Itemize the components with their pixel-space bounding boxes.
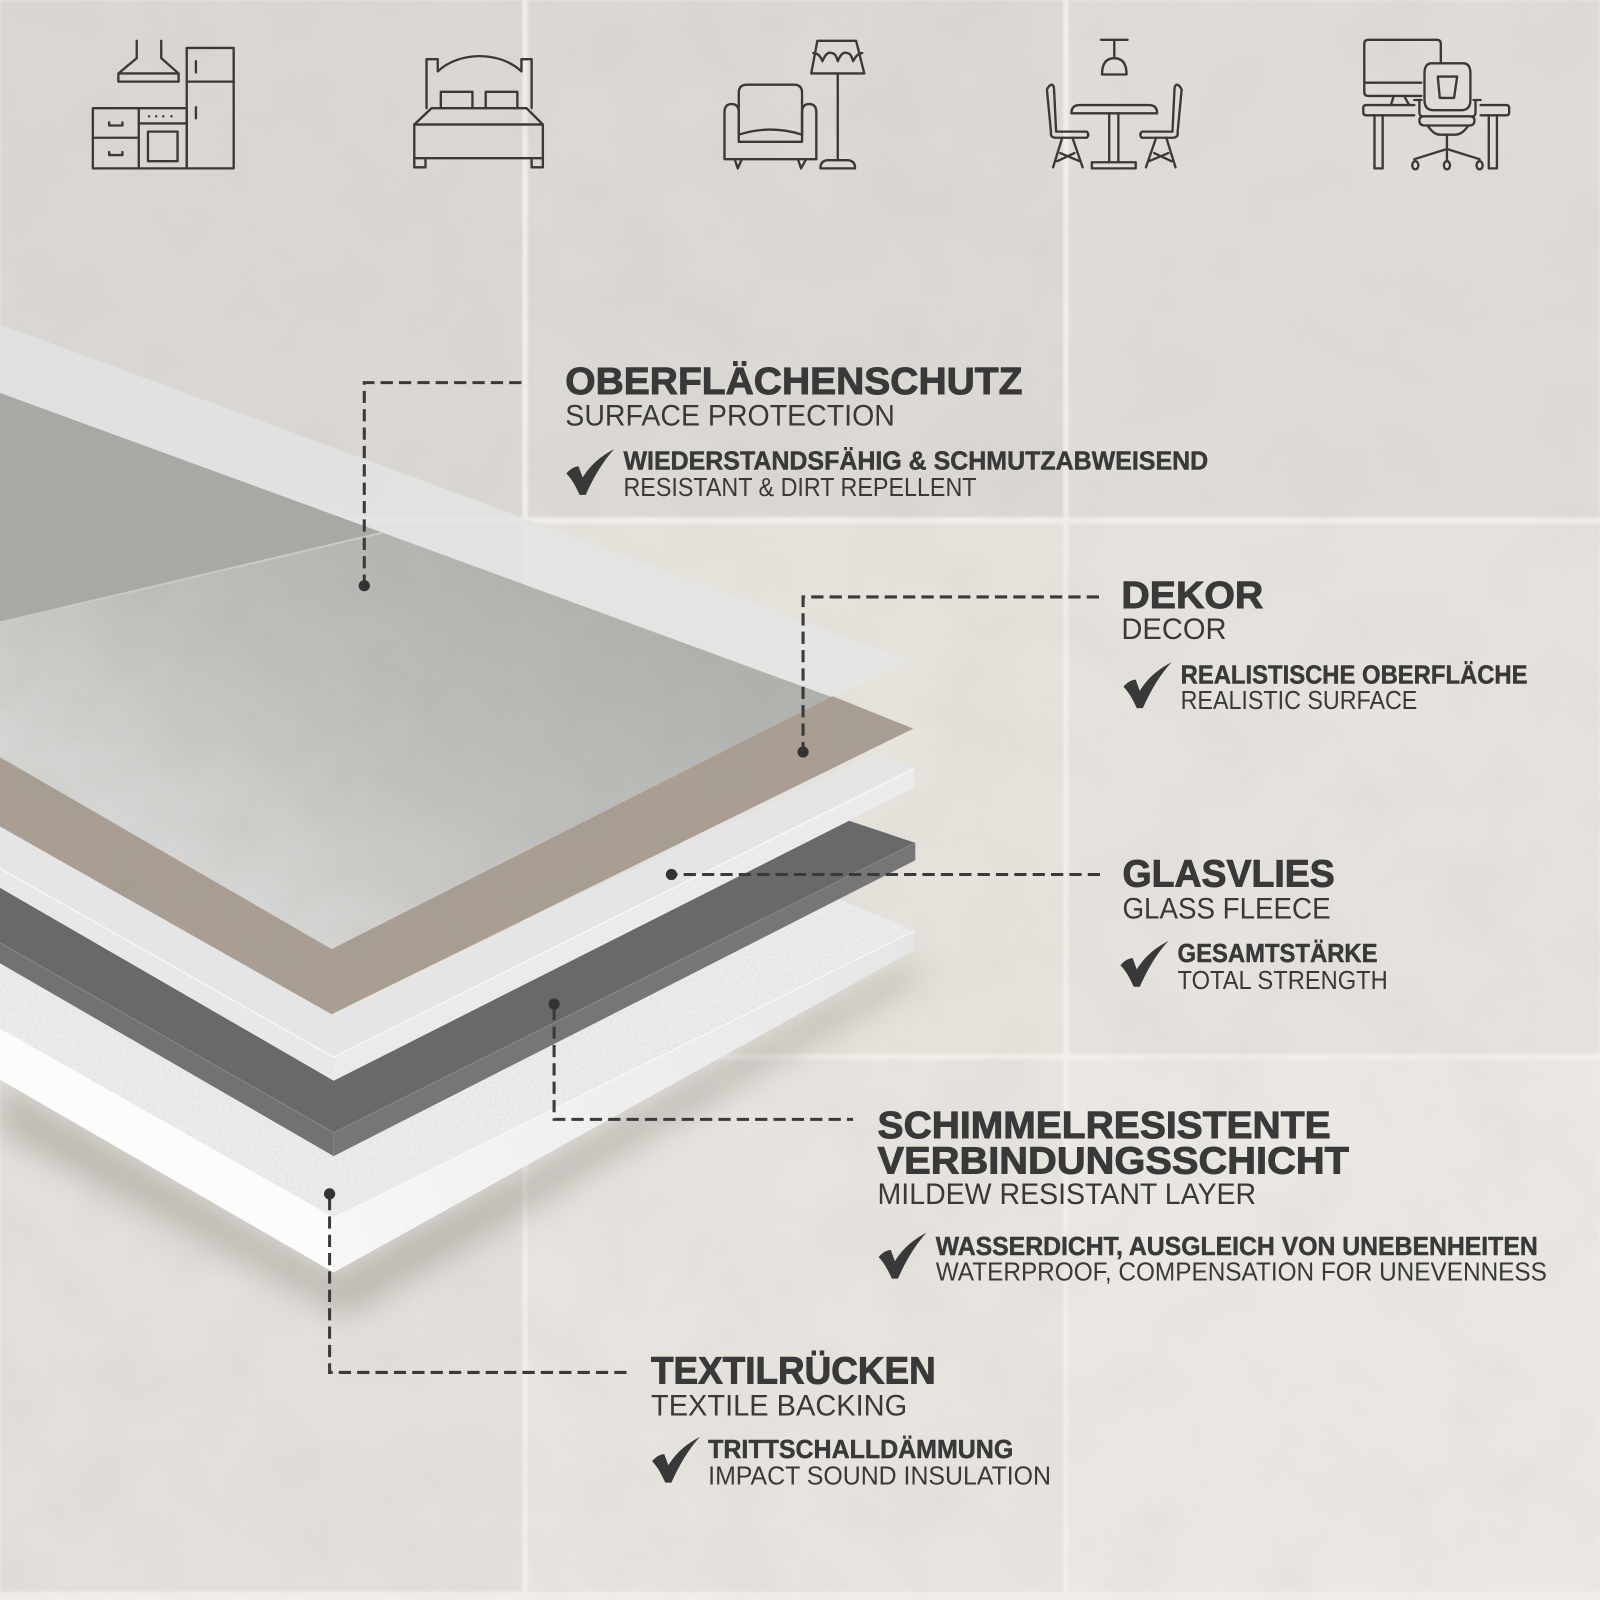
feature text English: WATERPROOF, COMPENSATION FOR UNEVENNESS: [936, 1259, 1547, 1287]
feature text German: WIEDERSTANDSFÄHIG & SCHMUTZABWEISEND: [623, 447, 1208, 475]
panel: Dekor: [1121, 574, 1528, 715]
icon: check mark: [652, 1437, 700, 1483]
feature text German: TRITTSCHALLDÄMMUNG: [708, 1436, 1013, 1464]
layer: transparent surface protection film: [0, 324, 911, 697]
icon: office desk: [1363, 40, 1509, 169]
heading: TEXTILRÜCKEN: [651, 1350, 936, 1392]
icon: check mark: [879, 1233, 927, 1279]
icon: armchair: [724, 85, 816, 168]
icon: check mark: [566, 449, 614, 495]
subheading: MILDEW RESISTANT LAYER: [878, 1178, 1256, 1211]
feature text English: TOTAL STRENGTH: [1178, 967, 1388, 995]
feature text English: IMPACT SOUND INSULATION: [708, 1463, 1051, 1491]
panel: Glasvlies: [1120, 853, 1388, 995]
layer: textile backing: [0, 931, 914, 1272]
feature text English: RESISTANT & DIRT REPELLENT: [623, 474, 977, 502]
leader: textile backing: [324, 1188, 631, 1372]
heading: GLASVLIES: [1122, 853, 1335, 895]
icon: check mark: [1123, 662, 1171, 708]
subheading: SURFACE PROTECTION: [565, 400, 895, 433]
subheading: TEXTILE BACKING: [651, 1389, 907, 1422]
shadow below the layer stack: [0, 959, 914, 1316]
heading line two: VERBINDUNGSSCHICHT: [878, 1139, 1349, 1181]
subheading: GLASS FLEECE: [1122, 892, 1331, 925]
leader: glass fleece: [666, 869, 1100, 880]
feature text German: GESAMTSTÄRKE: [1178, 940, 1378, 968]
feature text English: REALISTIC SURFACE: [1181, 687, 1417, 715]
heading: DEKOR: [1121, 574, 1263, 616]
icon: floor lamp: [811, 41, 864, 168]
icon: bed: [414, 56, 543, 167]
layered floor illustration: [0, 324, 915, 1272]
panel: Schimmelresistente Verbindungsschicht: [878, 1104, 1547, 1287]
layer: decor backing: [0, 696, 913, 1014]
icon: check mark: [1120, 941, 1168, 987]
panel: Oberflächenschutz: [565, 360, 1208, 502]
layer: glass fleece: [0, 753, 914, 1081]
layer: mildew resistant bonding layer: [0, 860, 915, 1217]
panel: Textilrücken: [651, 1350, 1051, 1491]
icon: kitchen: [93, 41, 234, 168]
feature text German: REALISTISCHE OBERFLÄCHE: [1181, 662, 1528, 690]
layer: dark core: [0, 788, 915, 1156]
heading line one: SCHIMMELRESISTENTE: [878, 1104, 1331, 1146]
leader: surface protection: [359, 383, 521, 591]
layer: decor tile print: [0, 393, 832, 949]
icon: dining table: [1047, 40, 1182, 168]
leader: mildew resistant layer: [548, 998, 853, 1119]
heading: OBERFLÄCHENSCHUTZ: [565, 360, 1022, 402]
feature text German: WASSERDICHT, AUSGLEICH VON UNEBENHEITEN: [936, 1233, 1538, 1261]
leader: decor: [797, 597, 1099, 758]
subheading: DECOR: [1121, 613, 1227, 646]
